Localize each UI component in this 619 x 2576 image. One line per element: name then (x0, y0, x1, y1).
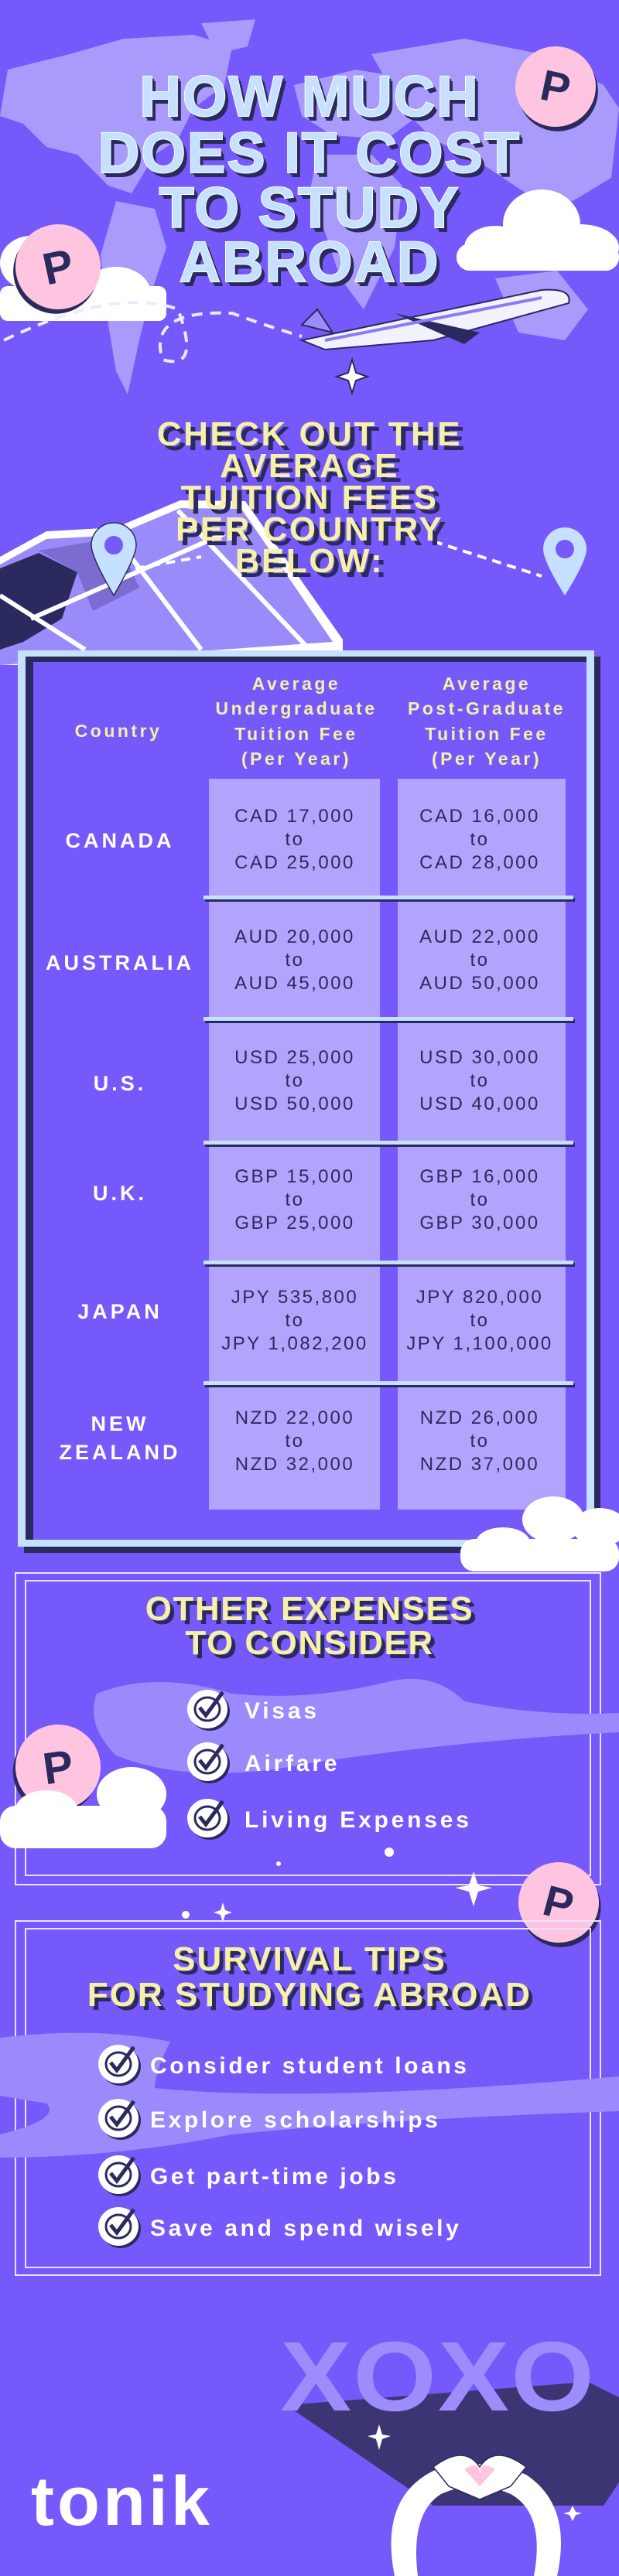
fee values: GBP 30,000 (419, 1213, 540, 1233)
subtitle: CHECK OUT THE (162, 420, 467, 458)
fee values: CAD 16,000 (419, 806, 540, 827)
pin: right (543, 527, 587, 595)
airplane (302, 290, 569, 350)
hands heart ring (392, 2455, 561, 2576)
title: ABROAD (183, 234, 443, 299)
coin: other expenses: P (39, 1741, 77, 1794)
title: ABROAD (180, 230, 439, 294)
table header: Undergraduate (215, 698, 378, 718)
country labels: JAPAN (77, 1300, 162, 1323)
fee values: USD 50,000 (234, 1094, 355, 1114)
country labels: U.S. (94, 1072, 146, 1095)
fee values: to (470, 1431, 490, 1452)
country labels: AUSTRALIA (46, 951, 194, 974)
panel: other expenses (0, 1573, 619, 1885)
fee values: NZD 37,000 (420, 1454, 539, 1475)
fee values: NZD 22,000 (235, 1407, 354, 1428)
fee values: USD 40,000 (419, 1094, 540, 1114)
table cells (209, 779, 566, 1510)
fee values: to (285, 829, 305, 850)
heading: survival tips (87, 1940, 535, 2018)
fee values: JPY 535,800 (231, 1287, 358, 1308)
sparkle (337, 360, 368, 393)
heading: survival tips: FOR STUDYING ABROAD (91, 1980, 535, 2018)
fee values: NZD 26,000 (420, 1407, 539, 1428)
heading: other expenses (145, 1590, 477, 1666)
subtitle: PER COUNTRY (180, 515, 448, 553)
title: HOW MUCH (143, 69, 484, 133)
fee values: JPY 1,082,200 (221, 1333, 368, 1354)
fee values: to (285, 1431, 305, 1452)
XOXO: XOXO (280, 2322, 596, 2432)
fee values: AUD 50,000 (419, 973, 540, 994)
fee values: CAD 28,000 (419, 852, 540, 873)
checklist: survival tips: Save and spend wisely (150, 2216, 461, 2241)
map graphic (0, 500, 343, 665)
sparkles bottom (368, 2424, 582, 2521)
checklist: other expenses (187, 1690, 472, 1840)
fee values: GBP 15,000 (234, 1166, 355, 1187)
title: HOW MUCH (142, 67, 482, 131)
title: ABROAD (182, 232, 442, 296)
coin: right between panels: P (539, 1875, 579, 1930)
title (98, 64, 525, 299)
title: DOES IT COST (102, 125, 525, 189)
heading: survival tips: SURVIVAL TIPS (176, 1944, 450, 1982)
flight path dashed (4, 302, 302, 361)
table header: Tuition Fee (425, 724, 549, 744)
checklist: survival tips: Get part-time jobs (150, 2164, 399, 2189)
table header: Post-Graduate (408, 698, 566, 718)
title: HOW MUCH (139, 64, 480, 128)
fee values: NZD 32,000 (235, 1454, 354, 1475)
panel: survival tips (0, 1921, 619, 2275)
fee values: to (285, 1310, 305, 1331)
subtitle: CHECK OUT THE (157, 415, 462, 453)
coin: right between panels (508, 1853, 611, 1957)
cloud: left (0, 236, 166, 321)
title: DOES IT COST (98, 121, 521, 185)
coin: top right (507, 39, 607, 138)
fee values: to (285, 950, 305, 971)
title: DOES IT COST (101, 123, 523, 187)
fee values: to (285, 1189, 305, 1210)
row separators (203, 896, 575, 1387)
fee values: to (470, 1310, 490, 1331)
heading: other expenses: TO CONSIDER (185, 1624, 434, 1662)
XOXO (280, 2322, 619, 2506)
cloud: right (457, 189, 619, 271)
subtitle: AVERAGE (224, 452, 404, 490)
coin: left (5, 217, 109, 322)
logo: tonik: tonik (31, 2463, 213, 2540)
table header (75, 674, 566, 769)
country labels: U.K. (93, 1182, 147, 1205)
fee values: to (470, 829, 490, 850)
heading: other expenses: TO CONSIDER (189, 1628, 438, 1666)
checklist: other expenses: Living Expenses (245, 1807, 472, 1833)
fee values: GBP 16,000 (419, 1166, 540, 1187)
subtitle: BELOW: (235, 542, 384, 580)
table header: Tuition Fee (234, 724, 358, 744)
subtitle: PER COUNTRY (176, 510, 443, 548)
table header: Country (75, 721, 162, 741)
coin: left: P (38, 240, 78, 295)
fee values: AUD 22,000 (419, 926, 540, 947)
fee values: AUD 20,000 (234, 926, 355, 947)
fee values: JPY 1,100,000 (406, 1333, 553, 1354)
fee values: JPY 820,000 (416, 1287, 543, 1308)
cloud: other expenses (0, 1767, 166, 1848)
table header: (Per Year) (241, 749, 351, 769)
subtitle: TUITION FEES (180, 479, 439, 517)
fee values: GBP 25,000 (234, 1213, 355, 1233)
title: TO STUDY (163, 180, 463, 244)
heading: other expenses: OTHER EXPENSES (149, 1594, 477, 1632)
table header: (Per Year) (432, 749, 542, 769)
title: TO STUDY (162, 178, 462, 242)
country labels: CANADA (65, 829, 175, 852)
country labels: NEW (91, 1412, 149, 1435)
pin: left (91, 523, 136, 595)
subtitle: AVERAGE (220, 447, 399, 485)
sparkles (182, 1848, 492, 1923)
subtitle: TUITION FEES (185, 483, 443, 521)
heading: survival tips: FOR STUDYING ABROAD (87, 1976, 532, 2014)
table frame (18, 650, 600, 1553)
fee values: to (285, 1070, 305, 1091)
heading: other expenses: OTHER EXPENSES (145, 1590, 474, 1628)
title: TO STUDY (159, 176, 460, 240)
world map background (0, 19, 619, 394)
country labels: ZEALAND (59, 1441, 181, 1464)
subtitle: BELOW: (240, 547, 388, 585)
fee values: AUD 45,000 (234, 973, 355, 994)
heading: survival tips: SURVIVAL TIPS (173, 1940, 446, 1978)
cloud: table bottom right (460, 1496, 619, 1571)
fee values (221, 806, 553, 1475)
fee values: USD 30,000 (419, 1047, 540, 1068)
country labels (46, 829, 194, 1464)
coin: top right: P (536, 60, 575, 114)
fee values: CAD 17,000 (234, 806, 355, 827)
table header: Average (252, 674, 340, 694)
fee values: to (470, 950, 490, 971)
fee values: CAD 25,000 (234, 852, 355, 873)
fee values: to (470, 1070, 490, 1091)
checklist: survival tips (98, 2045, 470, 2248)
fee values: to (470, 1189, 490, 1210)
fee values: USD 25,000 (234, 1047, 355, 1068)
checklist: survival tips: Consider student loans (150, 2053, 470, 2079)
coin: other expenses (7, 1719, 107, 1820)
table header: Average (443, 674, 531, 694)
checklist: other expenses: Visas (245, 1698, 320, 1724)
subtitle (157, 415, 467, 585)
checklist: other expenses: Airfare (245, 1751, 340, 1776)
checklist: survival tips: Explore scholarships (150, 2107, 440, 2133)
